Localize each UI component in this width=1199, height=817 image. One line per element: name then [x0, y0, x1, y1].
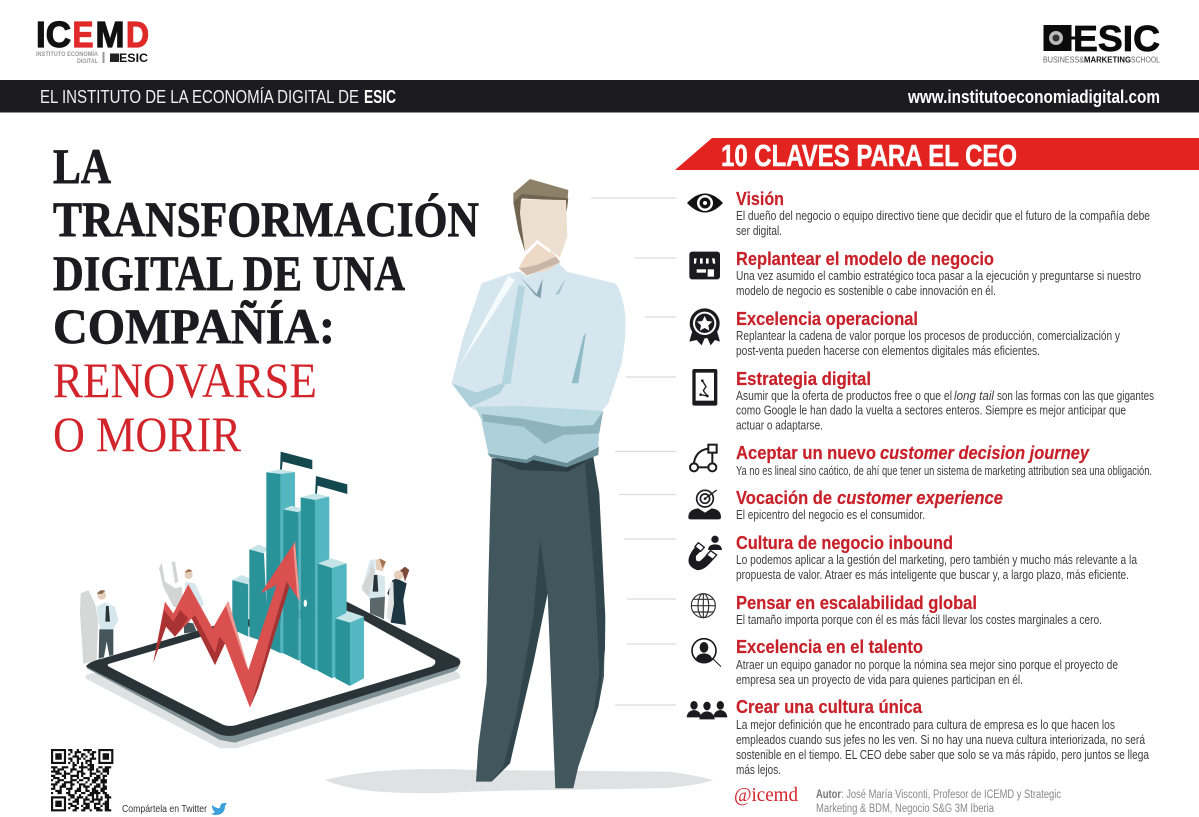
- QR code: [51, 749, 113, 811]
- leader lines: [591, 198, 676, 705]
- logo: ESIC Business & Marketing School: [1043, 18, 1160, 64]
- body: La mejor definición que he encontrado para cultura de empresa es lo que hacen los: [736, 718, 1115, 732]
- body: [736, 269, 1141, 298]
- icon: magnet and person: [688, 536, 722, 570]
- heading: Excelencia operacional: [736, 308, 918, 329]
- bar 5: [301, 493, 329, 670]
- body: Asumir que la oferta de productos free o que el: [736, 389, 952, 403]
- icon: flow diagram: [690, 445, 717, 471]
- logo: ESIC Business & Marketing School: SCHOOL: [1131, 56, 1160, 64]
- icon: award badge: [689, 308, 720, 345]
- title: RENOVARSE: [53, 352, 317, 408]
- header tagline: ESIC: [364, 86, 396, 107]
- icon: shop: [689, 252, 720, 279]
- bar 6: [318, 558, 347, 678]
- body: El epicentro del negocio es el consumidor.: [736, 508, 925, 522]
- item 1: Visión: [687, 188, 1150, 238]
- person: left with shadow: [80, 590, 118, 664]
- share on Twitter: Compártela en Twitter: [122, 803, 207, 815]
- handle: @icemd: @icemd: [734, 785, 798, 806]
- body: [736, 658, 1118, 687]
- tablet: [85, 602, 460, 748]
- body: Atraer un equipo ganador no porque la nómina sea mejor sino porque el proyecto de: [736, 658, 1118, 672]
- body: [736, 718, 1149, 777]
- author credit: : José María Visconti, Profesor de ICEMD y Strategic: [841, 789, 1061, 801]
- icon: eye: [687, 194, 723, 212]
- item 6: Vocación de customer experience: [688, 487, 1003, 522]
- heading: [736, 442, 1091, 463]
- icon: tablet: [692, 369, 717, 406]
- heading: Estrategia digital: [736, 368, 871, 389]
- heading: Vocación de: [736, 487, 832, 508]
- logo: ESIC Business & Marketing School: MARKETING: [1084, 56, 1131, 64]
- logo: ICEMD: INSTITUTO ECONOMÍA: [36, 50, 99, 58]
- author credit: [816, 789, 1061, 815]
- item 5: Aceptar un nuevo customer decision journey: [690, 442, 1152, 478]
- title: O MORIR: [53, 406, 242, 462]
- face: [520, 199, 567, 257]
- author credit: Autor: [816, 789, 841, 801]
- bar 3: [266, 469, 295, 653]
- logo: ICEMD: E: [72, 14, 94, 55]
- heading: Replantear el modelo de negocio: [736, 248, 994, 269]
- ground shadow: [325, 769, 713, 793]
- item 2: Replantear el modelo de negocio: [689, 248, 1141, 298]
- item 9: Excelencia en el talento: [692, 636, 1118, 687]
- heading: Pensar en escalabilidad global: [736, 592, 977, 613]
- author credit: Marketing & BDM, Negocio S&G 3M Iberia: [816, 803, 994, 815]
- shirt: [452, 263, 626, 417]
- logo: ICEMD: M: [96, 14, 124, 55]
- logo: ESIC Business & Marketing School: BUSINESS&: [1043, 56, 1085, 64]
- title: LA: [53, 138, 111, 194]
- item 8: Pensar en escalabilidad global: [691, 592, 1102, 627]
- title: COMPAÑÍA:: [53, 298, 335, 354]
- icon: magnifier with person: [692, 639, 721, 667]
- torso and head: [452, 179, 626, 467]
- illustration: tablet with rising bar chart and arrow: [80, 452, 460, 748]
- item 3: Excelencia operacional: [689, 308, 1121, 358]
- header bar: [0, 80, 1199, 112]
- logo: ICEMD: [36, 14, 149, 65]
- icon: bird: [211, 803, 227, 815]
- heading: Crear una cultura única: [736, 696, 923, 717]
- title: [53, 138, 479, 462]
- body: más lejos.: [736, 763, 781, 777]
- body: modelo de negocio es sostenible o cabe innovación en él.: [736, 284, 996, 298]
- logo: ICEMD: DIGITAL: [77, 59, 98, 65]
- icon: globe: [691, 594, 715, 618]
- icon: target person: [688, 490, 721, 519]
- bar chart: [232, 452, 364, 686]
- hair: [513, 179, 568, 252]
- title: TRANSFORMACIÓN: [53, 191, 479, 247]
- heading: [736, 487, 1003, 508]
- icon: team of three: [687, 701, 727, 719]
- heading: customer experience: [837, 487, 1003, 508]
- heading: Aceptar un nuevo: [736, 442, 876, 463]
- title: DIGITAL DE UNA: [53, 245, 405, 301]
- bar 1: [232, 575, 252, 637]
- body: long tail: [954, 389, 995, 403]
- red arrow: [153, 542, 307, 708]
- heading: Excelencia en el talento: [736, 636, 923, 657]
- shirt highlights: [458, 276, 515, 367]
- logo: ICEMD: ESIC: [119, 51, 148, 65]
- body: [736, 209, 1150, 238]
- body: [736, 553, 1137, 582]
- body: post-venta pueden hacerse con elementos digitales más eficientes.: [736, 344, 1040, 358]
- person: middle waving: [159, 562, 204, 633]
- people: right couple: [362, 558, 409, 625]
- item 10: Crear una cultura única: [687, 696, 1149, 777]
- bar 2: [249, 545, 268, 643]
- item 4: Estrategia digital: [692, 368, 1154, 432]
- header tagline: EL INSTITUTO DE LA ECONOMÍA DIGITAL DE: [40, 86, 359, 107]
- logo: ICEMD: IC: [36, 14, 71, 55]
- header website: www.institutoeconomiadigital.com: [907, 87, 1160, 107]
- heading: Cultura de negocio inbound: [736, 532, 953, 553]
- body: Replantear la cadena de valor porque los procesos de producción, comercialización y: [736, 329, 1121, 343]
- body: [736, 329, 1121, 358]
- body: ser digital.: [736, 224, 782, 238]
- bar 7: [335, 612, 364, 686]
- banner: 10 claves para el CEO: 10 CLAVES PARA EL CEO: [721, 138, 1017, 173]
- body: empresa sea un proyecto de vida para quienes participan en él.: [736, 673, 1023, 687]
- body: El tamaño importa porque con él es más fácil llevar los costes marginales a cero.: [736, 613, 1102, 627]
- heading: Visión: [736, 188, 784, 209]
- item 7: Cultura de negocio inbound: [688, 532, 1137, 582]
- body: actuar o adaptarse.: [736, 418, 823, 432]
- logo: ESIC Business & Marketing School: ESIC: [1073, 18, 1160, 59]
- illustration: thinking man: [452, 179, 626, 788]
- heading: customer decision journey: [880, 442, 1091, 463]
- body: son las formas con las que gigantes: [997, 389, 1154, 403]
- trousers: [476, 457, 605, 788]
- bar 4: [283, 506, 301, 661]
- logo: ICEMD: D: [126, 14, 149, 55]
- body: [736, 389, 1154, 432]
- hand on chin: [518, 241, 561, 275]
